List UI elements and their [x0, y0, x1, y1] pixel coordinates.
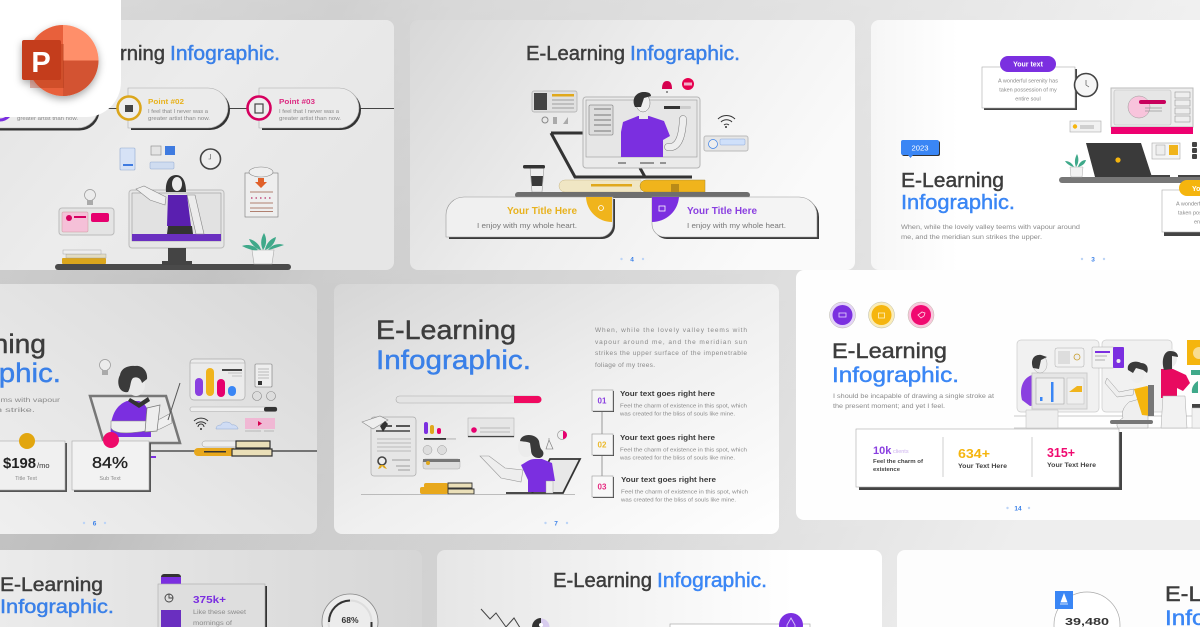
callout: your text purple: Your text [1013, 62, 1044, 68]
description: foliage of my trees. [595, 362, 655, 369]
description: vapour around me, and the meridian sun [595, 339, 747, 346]
heading [0, 575, 114, 618]
statistics card [856, 429, 1122, 490]
statistics card: existence [873, 467, 901, 473]
page number 7 [544, 520, 568, 528]
statistic card 375k: Like these sweet [193, 610, 246, 616]
right title card [652, 197, 819, 239]
description: strikes the upper surface of the impenetrable [595, 350, 747, 357]
year tag: 2023 [912, 146, 929, 152]
illustration: woman on monitor [55, 146, 291, 270]
callout: your text purple: entire soul [1015, 96, 1041, 102]
page number 7: 7 [554, 520, 558, 528]
heading [901, 170, 1015, 214]
list item 03: was created for the bliss of souls like mine. [621, 498, 736, 504]
heading: slide title [66, 43, 280, 65]
panel: bottom left slide [0, 550, 422, 627]
heading [0, 329, 61, 388]
heading: slide title: Infographic. [630, 43, 740, 65]
illustration: tablet person and dashboard [90, 359, 317, 458]
left title card: I enjoy with my whole heart. [477, 221, 577, 230]
description [901, 224, 1080, 241]
illustration: man on laptop screen [515, 78, 750, 198]
point 03 pill: I feel that I never was a [279, 109, 340, 115]
page number 4: 4 [630, 256, 634, 264]
badge: PowerPoint logo [0, 0, 121, 117]
line chart [481, 609, 522, 627]
icon row: three circles [830, 302, 934, 328]
list item 01: Feel the charm of existence in this spot, which [620, 404, 747, 410]
pricing card: /mo [37, 461, 50, 470]
panel: bottom right slide [897, 550, 1200, 627]
description [833, 393, 994, 410]
statistics card: Your Text Here [1047, 462, 1096, 469]
description: me, and the meridian sun strikes the upper. [901, 234, 1042, 241]
percentage card: Sub Text [99, 476, 121, 482]
year tag [901, 140, 940, 158]
heading: slide title: Infographic. [170, 43, 280, 65]
list item 02: Your text goes right here [620, 433, 715, 442]
heading [376, 315, 531, 375]
point 02 pill [118, 88, 230, 130]
donut chart 68% [322, 594, 378, 627]
panel: slide 4 with two title cards [410, 20, 855, 270]
statistics card: clients [893, 449, 909, 455]
list item 03: Feel the charm of existence in this spot, which [621, 490, 748, 496]
heading: E-Learning [0, 575, 103, 596]
statistics card: 634+ [958, 447, 990, 461]
statistic card 375k [158, 574, 267, 627]
callout: your text purple: taken possession of my [999, 88, 1057, 94]
list item 01: was created for the bliss of souls like mine. [620, 412, 735, 418]
icon: clock [1074, 74, 1098, 96]
heading: slide title [526, 43, 740, 65]
percentage card: 84% [92, 455, 128, 472]
page number 14 [1006, 506, 1030, 512]
description [595, 327, 747, 369]
description: the present moment; and yet I feel. [833, 403, 945, 410]
callout: your text purple [982, 56, 1077, 110]
list item 02 [592, 433, 747, 477]
list item 01: Your text goes right here [620, 389, 715, 398]
panel: slide 7 with numbered list [334, 284, 779, 534]
icon: PowerPoint mark: P [31, 47, 51, 79]
description: When, while the lovely valley teems with vapour around [901, 224, 1080, 231]
percentage card [72, 432, 151, 492]
panel: slide 14 with statistics [796, 270, 1200, 520]
heading: E-Learning [553, 570, 652, 592]
statistics card: Your Text Here [958, 463, 1007, 470]
heading: Infographic. [657, 570, 767, 592]
left title card: Your Title Here [507, 206, 577, 217]
heading [1165, 583, 1200, 627]
heading: E-Learning [376, 315, 516, 345]
description: I should be incapable of drawing a single stroke at [833, 393, 994, 400]
illustration: laptop and screen [1059, 88, 1200, 183]
point 03 pill: greater artist than now. [279, 116, 342, 122]
point 02 pill: I feel that I never was a [148, 109, 209, 115]
pricing card [0, 433, 67, 492]
pie chart [532, 618, 550, 627]
circle stat 39,480 [1054, 591, 1120, 627]
page number 14: 14 [1014, 506, 1022, 512]
point 01 pill [0, 88, 100, 130]
point 02 pill: greater artist than now. [148, 116, 211, 122]
list item 03: Your text goes right here [621, 475, 716, 484]
page number 6: 6 [93, 520, 97, 528]
heading: Infographic. [901, 192, 1015, 214]
list item 01 [592, 389, 747, 435]
statistic card 375k: mornings of [193, 621, 232, 627]
statistic card 375k: 375k+ [193, 595, 226, 606]
heading: slide title: E-Learning [66, 43, 165, 65]
page number 3 [1081, 256, 1105, 264]
page number 6 [83, 520, 106, 528]
heading [553, 570, 767, 592]
callout: your text purple: A wonderful serenity has [998, 78, 1058, 84]
statistics card: Feel the charm of [873, 459, 923, 465]
heading [832, 340, 959, 387]
point 03 pill [248, 88, 361, 130]
heading: E-Learning [832, 340, 947, 363]
list item 02: 02 [598, 440, 607, 450]
card with purple badge [670, 613, 810, 627]
pricing card: Title Text [15, 476, 37, 482]
heading: Infographic. [376, 345, 531, 375]
donut chart 68%: 68% [341, 615, 359, 625]
list item 03: 03 [598, 482, 607, 492]
page number 4 [620, 256, 644, 264]
panel: slide 3 with laptop [871, 20, 1200, 270]
callout: your text gold [1162, 180, 1200, 236]
panel: slide 6 with pricing [0, 284, 317, 534]
page number 3: 3 [1091, 256, 1095, 264]
illustration: certificate and woman [361, 396, 580, 494]
right title card: I enjoy with my whole heart. [687, 221, 786, 230]
list item 02: was created for the bliss of souls like mine. [620, 456, 735, 462]
left title card [446, 197, 615, 239]
connector line [96, 108, 394, 110]
list item 03 [592, 475, 748, 504]
heading: E-Learning [901, 170, 1004, 192]
heading: slide title: E-Learning [526, 43, 625, 65]
list item 01: 01 [598, 396, 607, 406]
statistics card: 315+ [1047, 446, 1075, 460]
statistics card: 10k [873, 445, 892, 457]
panel: slide with three points [0, 20, 394, 270]
heading: Infographic. [832, 364, 959, 387]
list item 02: Feel the charm of existence in this spot, which [620, 448, 747, 454]
pricing card: $198 [3, 455, 36, 472]
point 03 pill: Point #03 [279, 97, 315, 106]
panel: bottom centre slide [437, 550, 882, 627]
heading: Infographic. [0, 597, 114, 618]
point 01 pill: greater artist than now. [17, 116, 79, 122]
description: When, while the lovely valley teems with [595, 327, 747, 334]
illustration: people with screens [1014, 340, 1200, 428]
point 02 pill: Point #02 [148, 97, 184, 106]
right title card: Your Title Here [687, 206, 757, 217]
